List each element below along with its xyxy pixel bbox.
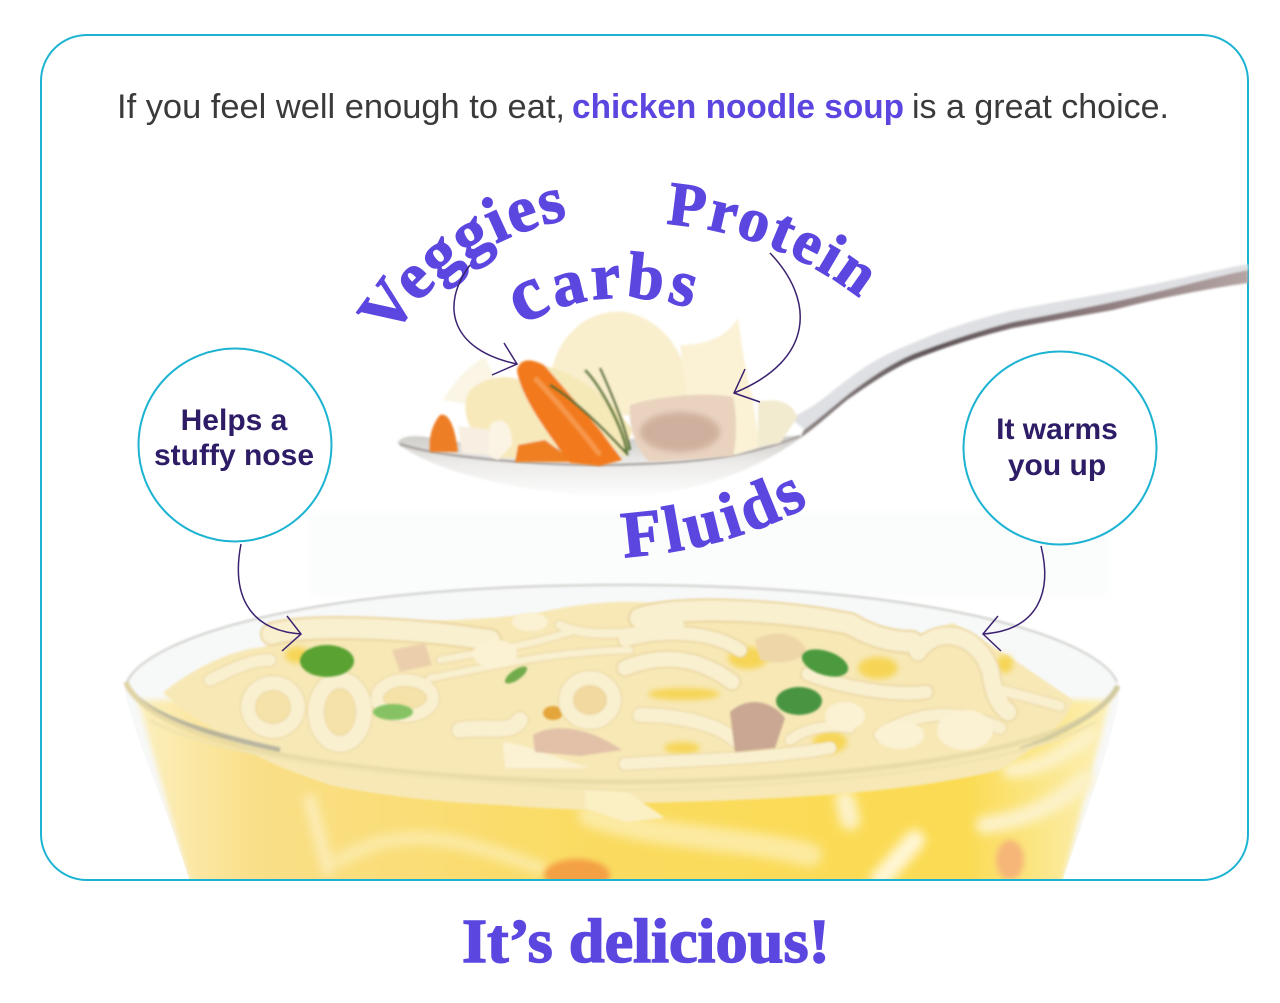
noodle mass (163, 602, 1073, 803)
arrow: left circle to bowl (238, 544, 301, 651)
yellow broth pockets (285, 647, 1013, 754)
herb (550, 385, 628, 455)
arrow: Protein to chicken (734, 253, 800, 402)
soup body (138, 700, 1110, 884)
chicken (630, 395, 736, 462)
spoon handle (790, 264, 1248, 438)
noodles (210, 610, 1060, 768)
callout: It warms you up: It warms (996, 413, 1118, 446)
label: Carbs: carbs (512, 250, 696, 320)
chicken pieces (392, 634, 806, 756)
food (430, 312, 797, 466)
arrow: right circle to bowl (983, 546, 1045, 651)
photo: spoon with soup (397, 264, 1248, 496)
noodle knots (473, 613, 993, 768)
label: Fluids: Fluids (620, 477, 806, 558)
heading: If you feel well enough to eat, (117, 88, 565, 126)
heading (117, 88, 1169, 126)
callout: It warms you up: you up (1008, 449, 1106, 482)
callout: Helps a stuffy nose: Helps a (181, 404, 288, 437)
glass rim (126, 585, 1118, 790)
footer headline: It’s delicious! (462, 908, 830, 976)
cream band below rim (256, 754, 590, 811)
heading: chicken noodle soup (572, 88, 904, 126)
heading: is a great choice. (912, 88, 1169, 126)
label: Protein: Protein (666, 182, 872, 298)
callout: Helps a stuffy nose (138, 348, 332, 542)
frame (41, 35, 1248, 880)
callout: Helps a stuffy nose: stuffy nose (154, 439, 314, 472)
label: Veggies: Veggies (356, 190, 565, 322)
cream noodle behind herb (545, 366, 632, 458)
carrot (517, 360, 622, 466)
peas (300, 644, 852, 720)
arrow: Veggies to carrot (454, 265, 517, 375)
submerged noodles (310, 735, 1090, 880)
callout: It warms you up (964, 352, 1156, 544)
photo: bowl of chicken noodle soup (122, 583, 1121, 879)
spoon bowl (397, 436, 803, 496)
background haze behind bowl (310, 512, 1110, 597)
